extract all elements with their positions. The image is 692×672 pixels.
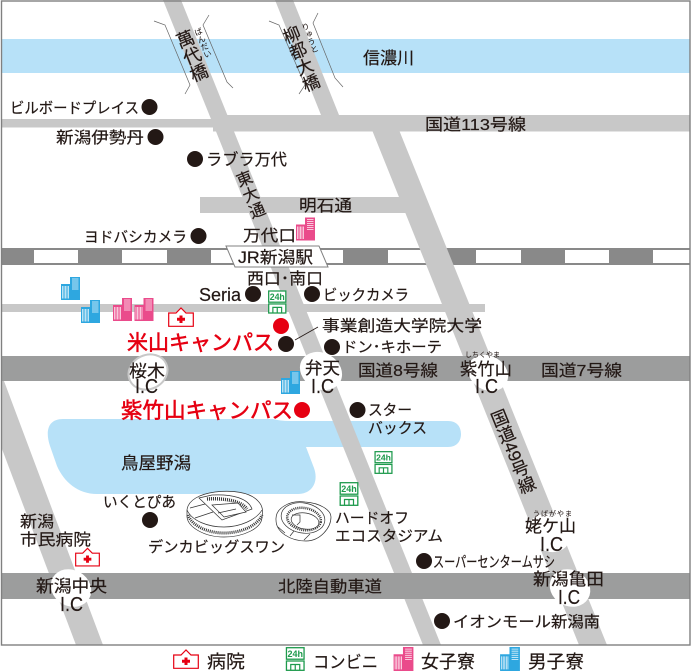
- icons: 女子寮: [113, 218, 315, 321]
- highway: 北陸自動車道: [2, 573, 690, 599]
- IC: 新潟亀田: I.C: [558, 587, 580, 609]
- IC: 新潟亀田: [533, 570, 604, 609]
- road: 柳都大橋: [275, 0, 341, 120]
- place: 事業創造大学院大学: [278, 317, 482, 352]
- IC: 紫竹山: しちくやま: [465, 351, 500, 359]
- place: Seria: Seria: [199, 285, 242, 305]
- label: デンカビッグスワン: デンカビッグスワン: [148, 538, 285, 556]
- icons: 男子寮: [61, 277, 300, 394]
- place: ビックカメラ: ビックカメラ: [323, 287, 409, 304]
- bridge label: 萬代橋: [154, 15, 233, 94]
- label: 新潟市民病院: 新潟: [20, 513, 54, 531]
- place: ビルボードプレイス: ビルボードプレイス: [10, 100, 139, 117]
- IC: 新潟亀田: 新潟亀田: [533, 570, 604, 589]
- legend: コンビニ: [286, 648, 378, 672]
- legend: 病院: 病院: [207, 652, 245, 672]
- bridge label: 柳都大橋: [269, 13, 343, 96]
- IC: 弁天: 弁天: [305, 359, 340, 378]
- label: 信濃川: 信濃川: [363, 49, 414, 68]
- interchange marks: [44, 344, 597, 614]
- IC: 新潟中央: [36, 577, 107, 616]
- label: 国道8号線: 国道8号線: [358, 362, 438, 380]
- place: Seria: [199, 285, 261, 305]
- IC: 弁天: I.C: [311, 376, 334, 398]
- label: 新潟市民病院: [20, 513, 91, 549]
- bridge label: 萬代橋: 萬代橋: [172, 27, 211, 86]
- IC: 桜木: 桜木: [129, 362, 165, 381]
- place: ラブラ万代: ラブラ万代: [206, 150, 287, 169]
- place: いくとぴあ: [103, 494, 176, 528]
- railway: JR: [2, 248, 690, 265]
- legend: コンビニ: コンビニ: [313, 653, 378, 672]
- legend: [174, 647, 584, 672]
- place: ハードオフエコスタジアム: エコスタジアム: [335, 528, 443, 545]
- road: 明石通: [200, 197, 410, 213]
- label: 北陸自動車道: 北陸自動車道: [278, 578, 382, 596]
- place: スーパーセンタームサシ: [416, 553, 555, 571]
- IC: 弁天: [305, 359, 340, 398]
- IC: 新潟中央: 新潟中央: [36, 577, 107, 596]
- road: 左下の通り: [2, 381, 103, 645]
- campus marker: 紫竹山キャンパス: 紫竹山キャンパス: [121, 399, 293, 423]
- label: 西口・南口: 西口･南口: [247, 270, 323, 288]
- place: ハードオフエコスタジアム: [335, 510, 443, 545]
- label: 東大通: 東大通: [231, 168, 268, 222]
- icons: コンビニ: [269, 291, 392, 505]
- campus marker: 米山キャンパス: 米山キャンパス: [127, 332, 274, 355]
- IC: 桜木: I.C: [135, 376, 158, 398]
- place: 事業創造大学院大学: 事業創造大学院大学: [322, 317, 482, 335]
- label: 国道49号線: 国道49号線: [487, 406, 539, 497]
- river: 信濃川: [2, 39, 690, 73]
- bridge label: 柳都大橋: 柳都大橋: [278, 23, 323, 96]
- place: ヨドバシカメラ: ヨドバシカメラ: [84, 229, 187, 246]
- label: 鳥屋野潟: 鳥屋野潟: [121, 454, 191, 473]
- icons: 病院: [76, 308, 193, 566]
- label: 国道113号線: 国道113号線: [425, 116, 526, 134]
- label: 新潟市民病院: 市民病院: [20, 531, 91, 549]
- lake: 鳥屋野潟: [48, 419, 461, 494]
- road: 駅南の通り: [2, 304, 485, 312]
- IC: 姥ケ山: [525, 509, 576, 556]
- place: スターバックス: スター: [368, 402, 412, 419]
- road: 国道113号線: [2, 115, 690, 132]
- label: 国道7号線: 国道7号線: [541, 362, 622, 380]
- place: スーパーセンタームサシ: スーパーセンタームサシ: [433, 554, 555, 571]
- campus marker: 米山キャンパス: [127, 318, 289, 355]
- legend: 女子寮: [394, 647, 475, 672]
- IC: 桜木: [129, 362, 165, 398]
- place: ハードオフエコスタジアム: ハードオフ: [335, 510, 409, 527]
- place: スターバックス: [350, 402, 427, 437]
- bridge label: 柳都大橋: りゅうと: [300, 21, 320, 54]
- IC: 姥ケ山: 姥ケ山: [525, 517, 576, 536]
- label: 万代口: 万代口: [243, 227, 296, 245]
- IC: 紫竹山: [460, 351, 512, 398]
- road: 国道49号線: [368, 120, 607, 645]
- station sign: JR新潟駅: JR新潟駅: [238, 248, 313, 267]
- IC: 姥ケ山: I.C: [540, 534, 563, 556]
- legend: 病院: [174, 650, 245, 672]
- IC: 紫竹山: I.C: [475, 376, 498, 398]
- place: ドン・キホーテ: ドン･キホーテ: [342, 339, 442, 356]
- place: スターバックス: バックス: [368, 420, 427, 437]
- IC: 姥ケ山: うばがやま: [533, 509, 572, 518]
- IC: 紫竹山: 紫竹山: [460, 360, 512, 379]
- legend: 男子寮: 男子寮: [528, 652, 584, 672]
- icon: デンカビッグスワン stadium: [187, 491, 263, 537]
- highway: 国道8号線・国道7号線: [2, 356, 690, 381]
- legend: 女子寮: 女子寮: [421, 652, 475, 672]
- icon: ハードオフエコスタジアム stadium: [276, 499, 331, 541]
- station sign: JR新潟駅: [226, 246, 328, 267]
- bridge label: 萬代橋: ばんだい: [193, 26, 213, 59]
- place: いくとぴあ: いくとぴあ: [103, 494, 176, 511]
- road: 東大通: [163, 0, 441, 645]
- legend: 男子寮: [500, 647, 584, 672]
- label: 明石通: 明石通: [299, 197, 352, 215]
- place: 新潟伊勢丹: 新潟伊勢丹: [56, 129, 144, 147]
- place: イオンモール新潟南: イオンモール新潟南: [453, 613, 600, 631]
- IC: 新潟中央: I.C: [60, 594, 83, 616]
